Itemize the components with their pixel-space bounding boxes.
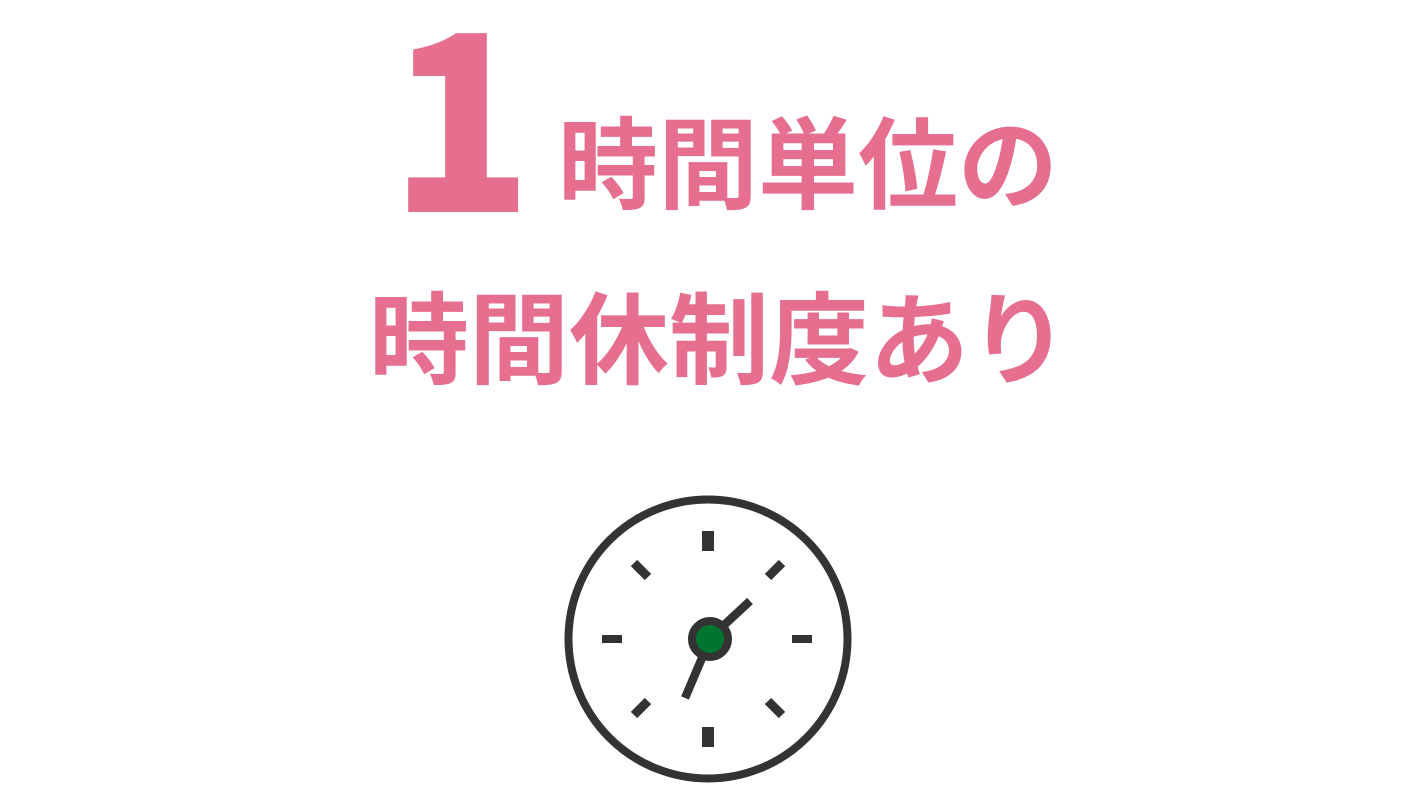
icon: clock	[568, 500, 848, 778]
heading: second line: 時間休制度あり	[369, 260, 1069, 405]
clock centre	[692, 621, 728, 657]
clock face	[568, 500, 848, 778]
clock hands	[685, 601, 750, 698]
clock tick marks	[602, 531, 812, 747]
heading: first line: 時間単位の	[558, 85, 1058, 230]
